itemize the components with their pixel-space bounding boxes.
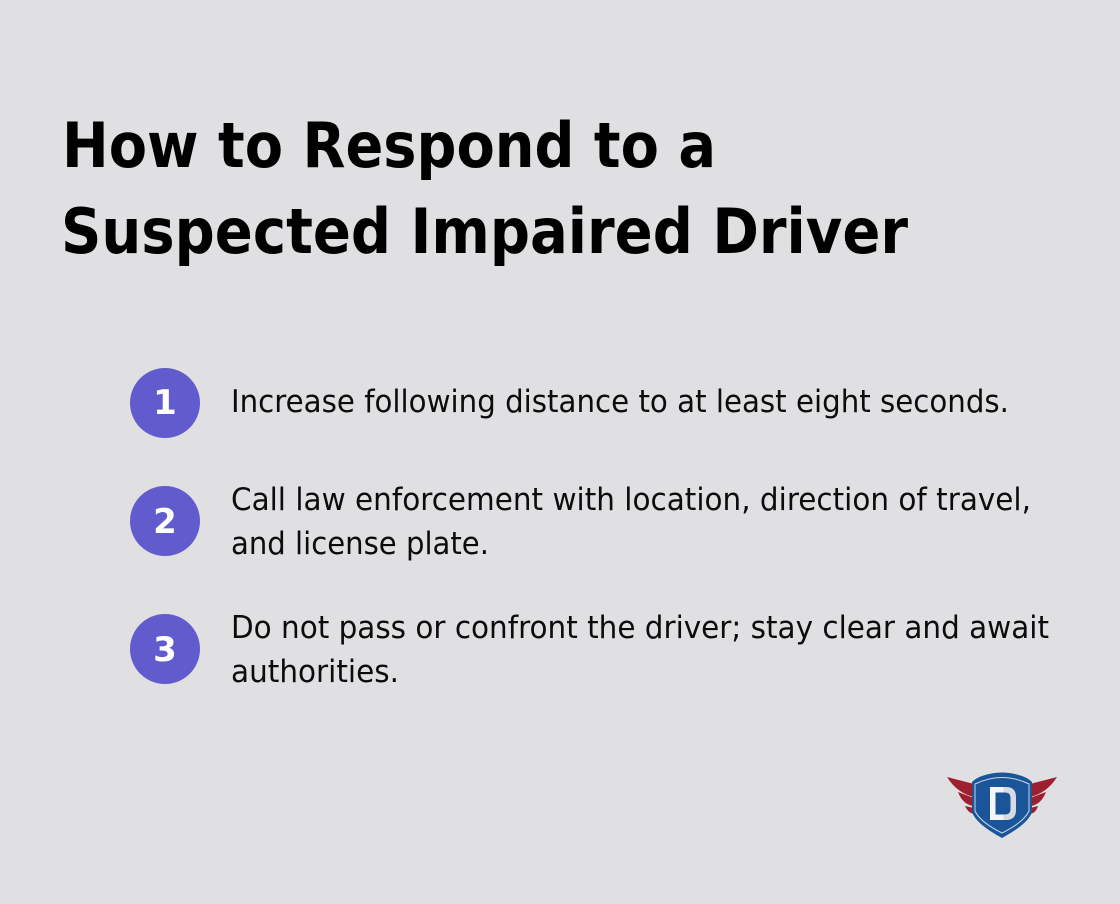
title: Suspected Impaired Driver xyxy=(61,195,908,268)
step 2 text: and license plate. xyxy=(231,526,489,562)
step 1 number badge: 1 xyxy=(153,383,177,423)
step 3 number badge xyxy=(130,614,200,684)
step 2 text xyxy=(231,482,1031,562)
shield xyxy=(972,772,1032,838)
step 3 number badge: 3 xyxy=(153,630,177,670)
step 1 xyxy=(130,368,1009,438)
step 2 xyxy=(130,482,1031,562)
letter D xyxy=(990,787,1016,820)
step 1 text: Increase following distance to at least eight seconds. xyxy=(231,384,1009,420)
title: How to Respond to a xyxy=(62,109,716,182)
step 2 number badge: 2 xyxy=(153,502,177,542)
step 3 text xyxy=(231,610,1049,690)
step 3 xyxy=(130,610,1049,690)
step 1 number badge xyxy=(130,368,200,438)
icon: shield logo with wings xyxy=(947,772,1057,838)
right wing xyxy=(1030,777,1057,814)
step 2 number badge xyxy=(130,486,200,556)
step 3 text: Do not pass or confront the driver; stay clear and await xyxy=(231,610,1049,646)
step 3 text: authorities. xyxy=(231,654,399,690)
title xyxy=(61,109,908,268)
step 2 text: Call law enforcement with location, direction of travel, xyxy=(231,482,1031,518)
left wing xyxy=(947,777,974,814)
